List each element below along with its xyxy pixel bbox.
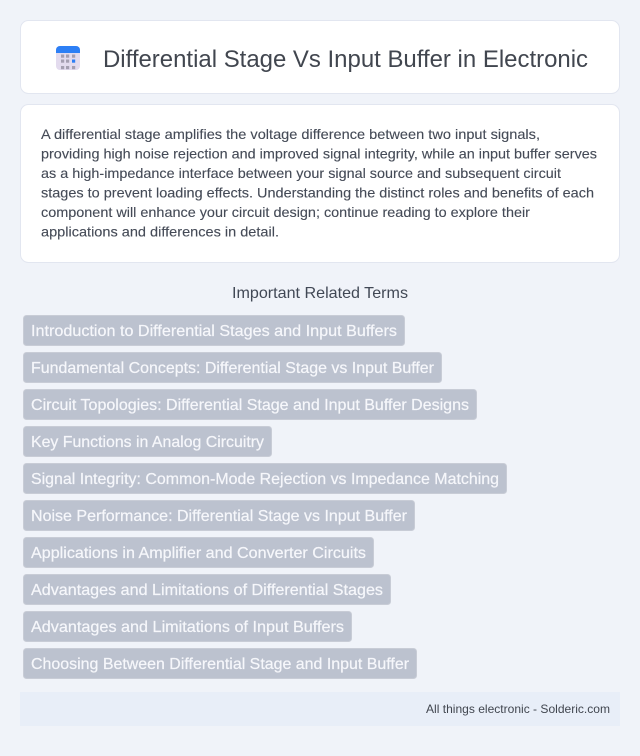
term 8 — [24, 574, 390, 604]
term 10: Choosing Between Differential Stage and Input Buffer — [31, 656, 410, 673]
term 2: Fundamental Concepts: Differential Stage vs Input Buffer — [31, 360, 435, 377]
term 3: Circuit Topologies: Differential Stage and Input Buffer Designs — [31, 397, 469, 414]
panel: title header — [20, 20, 620, 94]
term 5: Signal Integrity: Common-Mode Rejection vs Impedance Matching — [31, 471, 499, 488]
term 8: Advantages and Limitations of Differential Stages — [31, 582, 383, 599]
text block: description: as a high-impedance interface between your signal source and subsequent circuit — [41, 165, 561, 181]
icon: calendar grid — [56, 46, 80, 70]
term 3 — [24, 390, 476, 420]
term 9: Advantages and Limitations of Input Buffers — [31, 619, 344, 636]
title: Differential Stage Vs Input Buffer in Electronic — [103, 46, 588, 73]
footer — [20, 692, 620, 726]
footer credit: All things electronic - Solderic.com — [426, 702, 610, 716]
text block: description: component will enhance your circuit design; continue reading to explore their — [41, 204, 530, 220]
term 5 — [24, 464, 506, 494]
term 6 — [24, 500, 414, 530]
term 4: Key Functions in Analog Circuitry — [31, 434, 264, 451]
term 7: Applications in Amplifier and Converter Circuits — [31, 545, 366, 562]
heading: related terms: Important Related Terms — [232, 285, 408, 302]
term 10 — [24, 648, 416, 678]
text block: description — [41, 126, 597, 240]
text block: description: applications and differences in detail. — [41, 224, 279, 240]
list of related terms — [24, 316, 506, 678]
term 4 — [24, 426, 272, 456]
text block: description: stages to prevent loading effects. Understanding the distinct roles and benefits of each — [41, 184, 594, 200]
term 1 — [24, 316, 404, 346]
term 6: Noise Performance: Differential Stage vs Input Buffer — [31, 508, 408, 525]
term 2 — [24, 352, 442, 382]
term 1: Introduction to Differential Stages and Input Buffers — [31, 323, 397, 340]
panel: introduction text — [20, 104, 620, 262]
text block: description: A differential stage amplifies the voltage difference between two input signals, — [41, 126, 540, 142]
text block: description: providing high noise rejection and improved signal integrity, while an input buffer serves — [41, 146, 597, 162]
term 9 — [24, 612, 352, 642]
term 7 — [24, 538, 374, 568]
